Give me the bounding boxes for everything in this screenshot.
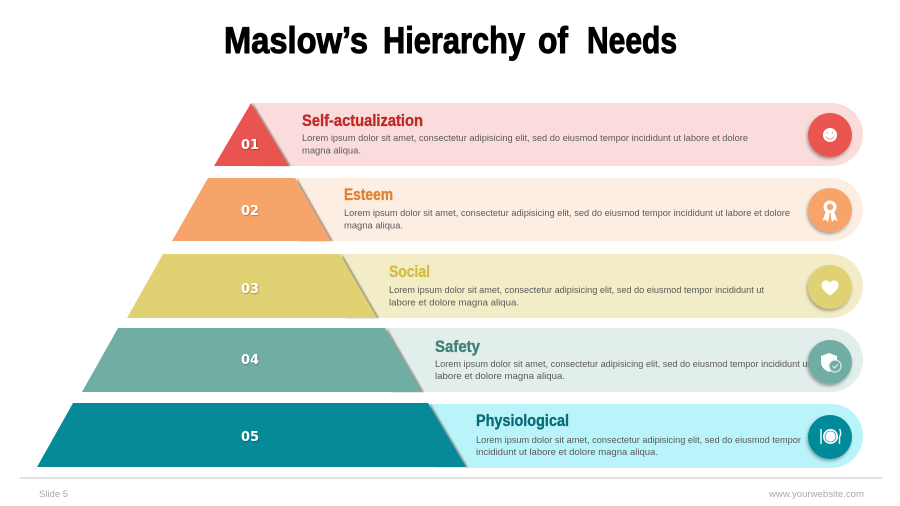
description: Lorem ipsum dolor sit amet, consectetur adipisicing elit, sed do eiusmod tempor incididunt ut labore et dolore [302, 132, 748, 143]
title [224, 20, 677, 61]
description: magna aliqua. [344, 220, 403, 230]
tier number: 05 [241, 430, 259, 445]
pyramid tier [127, 254, 377, 318]
tier number: 04 [241, 353, 259, 368]
description: Lorem ipsum dolor sit amet, consectetur adipisicing elit, sed do eiusmod tempor incididunt ut labore et dolore [344, 207, 790, 218]
icon: smiley [808, 113, 852, 157]
tier number: 02 [241, 204, 259, 219]
description: Lorem ipsum dolor sit amet, consectetur adipisicing elit, sed do eiusmod tempor incididunt ut [389, 284, 764, 295]
heading: Self-actualization [302, 111, 423, 130]
band [295, 178, 863, 241]
panel: level 01 self-actualization [214, 103, 863, 166]
tier number: 03 [241, 282, 259, 297]
band [428, 404, 863, 468]
title: Maslow’s [224, 20, 368, 61]
band [385, 328, 863, 392]
pyramid tier [82, 328, 422, 392]
icon: plate and cutlery [808, 415, 852, 459]
tier number: 01 [241, 138, 259, 153]
panel: level 02 esteem [172, 178, 863, 241]
description: incididunt ut labore et dolore magna aliqua. [476, 446, 658, 457]
description: labore et dolore magna aliqua. [389, 296, 519, 308]
pyramid tier [37, 403, 466, 467]
description: labore et dolore magna aliqua. [435, 370, 565, 381]
band [251, 103, 863, 166]
description: Lorem ipsum dolor sit amet, consectetur adipisicing elit, sed do eiusmod tempor incididunt ut [435, 358, 810, 369]
panel: level 04 safety [82, 328, 863, 392]
pyramid tier [214, 103, 289, 166]
pyramid tier [172, 178, 331, 241]
heading: Esteem [344, 185, 393, 204]
heading: Safety [435, 337, 480, 356]
title: Hierarchy [383, 20, 525, 61]
slide number: Slide 5 [39, 489, 68, 500]
heading: Social [389, 262, 430, 281]
band [340, 254, 863, 318]
icon: award ribbon [808, 188, 852, 232]
description: Lorem ipsum dolor sit amet, consectetur adipisicing elit, sed do eiusmod tempor [476, 434, 801, 445]
icon: heart [808, 265, 852, 309]
panel: level 03 social [127, 254, 863, 318]
website: www.yourwebsite.com [768, 489, 864, 500]
panel: level 05 physiological [37, 403, 863, 468]
icon: shield with check [808, 340, 852, 384]
title: Needs [587, 20, 677, 61]
title: of [538, 20, 569, 61]
footer divider [20, 478, 882, 479]
description: magna aliqua. [302, 144, 361, 156]
heading: Physiological [476, 411, 569, 430]
